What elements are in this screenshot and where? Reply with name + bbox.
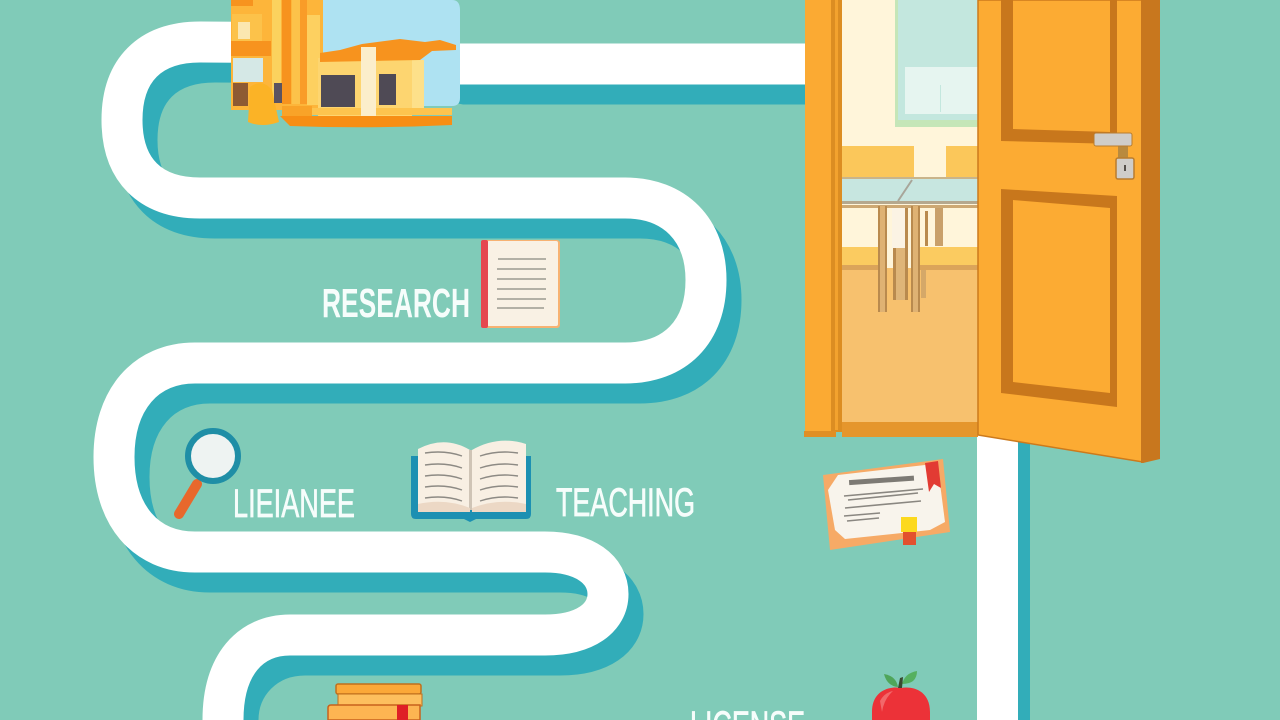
icon: open book xyxy=(411,441,531,522)
label: research: RESEARCH xyxy=(322,280,470,326)
icon: certificate xyxy=(823,459,950,550)
winding road xyxy=(114,42,810,720)
open door xyxy=(978,0,1160,463)
table and chair legs xyxy=(878,206,943,312)
icon: stack of books xyxy=(328,684,422,720)
door handle xyxy=(1094,133,1134,179)
icon: research notebook xyxy=(481,240,560,328)
icon: apple xyxy=(872,671,930,720)
road to the door xyxy=(977,430,1030,720)
icon: school building xyxy=(231,0,460,127)
doorway room xyxy=(842,0,978,437)
label: teaching: TEACHING xyxy=(556,481,695,525)
door frame xyxy=(804,0,842,437)
door upper panel xyxy=(1001,0,1117,144)
winding road shadow xyxy=(129,62,815,720)
label: licence: LIEIANEE xyxy=(233,482,355,526)
icon: magnifying glass xyxy=(179,431,238,514)
door lower panel xyxy=(1001,189,1117,407)
